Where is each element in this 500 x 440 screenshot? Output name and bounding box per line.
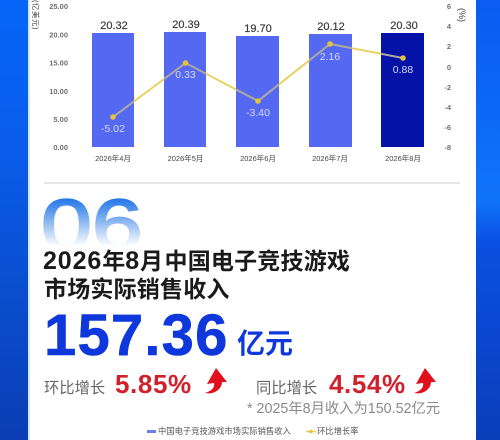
line value labels: -3.40 <box>246 107 270 119</box>
stat: month-over-month growth: 环比增长 <box>44 380 105 397</box>
month labels: 2026年6月 <box>240 153 276 163</box>
icon: up arrow <box>414 368 436 393</box>
title: 市场实际销售收入 <box>44 276 230 302</box>
right axis: percent: 6 <box>447 2 451 11</box>
month labels: 2026年7月 <box>312 153 348 163</box>
right axis: percent: -6 <box>444 123 451 132</box>
right axis: percent: -2 <box>444 83 451 92</box>
bar value labels: 20.12 <box>317 21 345 33</box>
stat: year-over-year growth: 4.54% <box>329 369 406 399</box>
bar value labels <box>100 19 418 35</box>
headline figure: 亿元 <box>237 328 293 359</box>
line value labels: -5.02 <box>101 123 125 135</box>
left axis: revenue: 20.00 <box>49 30 68 40</box>
left axis: revenue: 0.00 <box>53 143 68 152</box>
left axis: revenue <box>49 2 68 152</box>
icon: up arrow <box>205 368 227 393</box>
headline figure: 157.36 <box>44 303 229 368</box>
legend: line <box>306 430 316 433</box>
decorative number 06: 06 <box>41 186 143 266</box>
legend: bars <box>147 430 156 433</box>
legend <box>147 426 358 436</box>
legend: 环比增长率 <box>317 426 358 436</box>
month labels: 2026年5月 <box>168 153 203 163</box>
footnote: * 2025年8月收入为150.52亿元 <box>247 400 440 417</box>
stat: year-over-year growth <box>256 368 436 399</box>
line value labels <box>101 51 413 135</box>
left axis: revenue: 10.00 <box>49 87 68 96</box>
month labels <box>95 153 421 163</box>
bar chart: monthly revenue <box>92 32 424 147</box>
right axis: percent <box>444 2 452 152</box>
line value labels: 0.33 <box>175 69 196 81</box>
title: 2026年8月 <box>43 247 163 275</box>
line chart: month-over-month rate <box>110 41 406 120</box>
bar value labels: 20.39 <box>172 19 200 31</box>
title <box>43 247 350 302</box>
bar value labels: 19.70 <box>244 23 272 35</box>
card left edge highlight <box>28 0 30 440</box>
left axis: revenue: 25.00 <box>49 2 68 11</box>
left axis: revenue: 5.00 <box>53 115 68 124</box>
bar value labels: 20.32 <box>100 20 128 32</box>
right axis: percent: -8 <box>444 143 451 152</box>
left axis: revenue: 15.00 <box>49 58 68 68</box>
right blue band <box>476 0 500 440</box>
legend: 中国电子竞技游戏市场实际销售收入 <box>158 426 291 436</box>
month labels: 2026年4月 <box>95 153 131 163</box>
right axis unit: (%) <box>457 8 467 22</box>
stat: month-over-month growth: 5.85% <box>115 369 192 399</box>
right axis: percent: 2 <box>447 42 451 51</box>
title: 中国电子竞技游戏 <box>164 248 350 274</box>
bar value labels: 20.30 <box>390 20 418 32</box>
right axis: percent: 4 <box>447 22 452 31</box>
line value labels: 2.16 <box>320 51 340 63</box>
left axis unit: (亿美元) <box>31 0 41 30</box>
stat: month-over-month growth <box>44 368 227 399</box>
right axis: percent: -4 <box>444 103 452 112</box>
line value labels: 0.88 <box>393 64 413 76</box>
month labels: 2026年8月 <box>385 153 421 163</box>
right axis: percent: 0 <box>447 63 451 72</box>
stat: year-over-year growth: 同比增长 <box>256 380 317 397</box>
left blue band <box>0 0 28 440</box>
